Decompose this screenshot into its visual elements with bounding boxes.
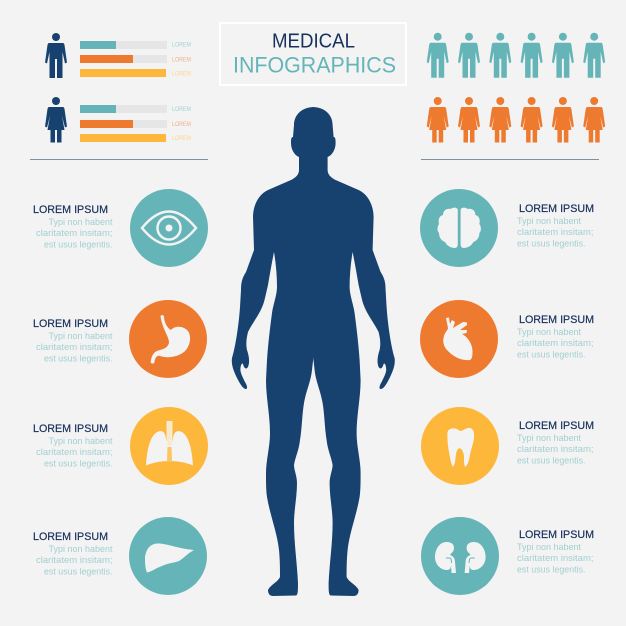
body text: claritatem insitam; bbox=[36, 447, 112, 458]
body text bbox=[517, 542, 594, 576]
panel: lungs bbox=[33, 407, 208, 485]
body text: est usus legentis. bbox=[44, 566, 112, 578]
title: infographics: INFOGRAPHICS bbox=[233, 52, 396, 78]
body text bbox=[36, 217, 113, 250]
icon: brain bbox=[420, 189, 498, 267]
body text: Typi non habent bbox=[48, 331, 113, 342]
heading: LOREM IPSUM bbox=[519, 420, 594, 432]
body text bbox=[36, 544, 113, 578]
title box bbox=[220, 23, 406, 85]
panel: female bars bbox=[45, 97, 191, 142]
panel: brain bbox=[420, 189, 594, 267]
human body silhouette bbox=[232, 107, 395, 596]
panel: male bars: LOREM bbox=[172, 42, 191, 48]
body text: claritatem insitam; bbox=[517, 338, 594, 349]
panel: female bars: LOREM bbox=[172, 107, 191, 113]
body text: Typi non habent bbox=[517, 327, 581, 338]
body text: est usus legentis. bbox=[44, 240, 112, 250]
body text: Typi non habent bbox=[517, 542, 581, 553]
icon: lungs bbox=[130, 407, 208, 485]
icon: eye bbox=[130, 189, 208, 267]
body text: Typi non habent bbox=[48, 544, 113, 555]
heading: LOREM IPSUM bbox=[519, 203, 594, 215]
panel: tooth bbox=[421, 407, 594, 485]
body text: est usus legentis. bbox=[517, 564, 586, 576]
body text: Typi non habent bbox=[517, 216, 581, 227]
body text: claritatem insitam; bbox=[517, 227, 594, 238]
panel: female bars: LOREM bbox=[172, 136, 191, 142]
heading: LOREM IPSUM bbox=[519, 314, 594, 326]
icon: man bbox=[45, 33, 67, 78]
icon: heart bbox=[420, 300, 498, 378]
body text: claritatem insitam; bbox=[517, 444, 594, 455]
body text: Typi non habent bbox=[48, 217, 113, 228]
title: medical: MEDICAL bbox=[272, 30, 355, 52]
heading: LOREM IPSUM bbox=[33, 531, 108, 543]
pictogram row: men bbox=[427, 33, 605, 78]
body text: claritatem insitam; bbox=[517, 553, 594, 564]
panel: eye bbox=[33, 189, 208, 267]
panel: kidneys bbox=[421, 517, 594, 595]
body text bbox=[36, 331, 113, 364]
body text bbox=[36, 436, 113, 470]
body text: est usus legentis. bbox=[44, 458, 112, 470]
body text: est usus legentis. bbox=[517, 238, 586, 250]
body text bbox=[517, 433, 594, 466]
body text: Typi non habent bbox=[48, 436, 113, 447]
icon: woman bbox=[45, 97, 67, 142]
panel: male bars bbox=[45, 33, 191, 78]
body text: claritatem insitam; bbox=[36, 555, 112, 566]
body text bbox=[517, 216, 594, 250]
body text: est usus legentis. bbox=[44, 354, 112, 364]
panel: heart bbox=[420, 300, 594, 378]
icon: tooth bbox=[421, 407, 499, 485]
panel: male bars: LOREM bbox=[172, 58, 191, 64]
heading: LOREM IPSUM bbox=[33, 318, 108, 330]
body text bbox=[517, 327, 594, 360]
heading: LOREM IPSUM bbox=[33, 204, 108, 216]
icon: liver bbox=[129, 517, 207, 595]
body text: claritatem insitam; bbox=[36, 342, 112, 353]
body text: Typi non habent bbox=[517, 433, 581, 444]
panel: liver bbox=[33, 517, 207, 595]
body text: est usus legentis. bbox=[517, 456, 586, 466]
pictogram row: women bbox=[427, 97, 605, 142]
body text: claritatem insitam; bbox=[36, 228, 112, 239]
heading: LOREM IPSUM bbox=[519, 529, 594, 541]
icon: stomach bbox=[129, 300, 207, 378]
panel: male bars: LOREM bbox=[172, 72, 191, 78]
heading: LOREM IPSUM bbox=[33, 423, 108, 435]
body text: est usus legentis. bbox=[517, 350, 586, 360]
icon: kidneys bbox=[421, 517, 499, 595]
panel: female bars: LOREM bbox=[172, 122, 191, 128]
panel: stomach bbox=[33, 300, 207, 378]
